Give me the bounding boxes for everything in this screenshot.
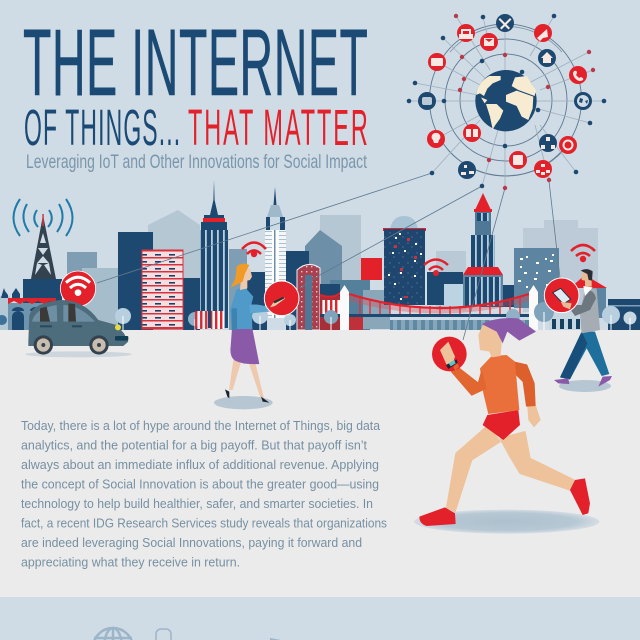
man tablet badge [544,278,579,313]
man coat [580,288,600,333]
woman head and hair [240,268,252,290]
trees [115,302,636,330]
intro paragraph: fact, a recent IDG Research Services study reveals that organizations [21,516,387,530]
icon: cropped shape [270,638,281,640]
title line two, red: THAT MATTER [188,100,368,157]
waterfront base strip [390,320,530,330]
runner shadow [414,510,599,534]
navy tower [118,232,153,330]
woman skirt [230,328,259,364]
small red dots [454,14,595,190]
background: lower panel [0,597,640,640]
node glyphs [422,18,589,175]
man legs [560,332,609,379]
church tower [463,193,503,306]
icon: wifi sign right [571,245,595,262]
intro paragraph: appreciating what they receive in return. [21,556,240,570]
icon: wifi sign centre [242,242,266,257]
slate block under bridge [363,290,390,329]
figure: man with tablet [544,269,612,392]
background: sky [0,0,640,330]
spokes [409,16,604,188]
icon: radio tower with signal waves [14,199,72,279]
wifi badge [60,271,96,306]
runner front leg [447,425,500,512]
runner hair [482,318,536,343]
bridge [320,285,540,330]
cropped icons in lower panel [93,628,281,640]
runner watch badge [432,337,467,371]
man head [582,273,592,287]
runner front arm [452,365,486,395]
icon: wifi sign bridge [424,260,448,276]
woman torso [230,287,253,329]
car with wifi badge [25,271,132,357]
car body [28,300,128,346]
red and white striped building [142,250,183,329]
network globe diagram [407,14,606,190]
empire state tower [200,180,228,328]
icon: small rounded box [156,629,171,640]
intro paragraph [21,419,387,570]
castle building [0,288,56,330]
network connector lines [97,173,560,340]
white spire tower [265,187,286,318]
runner back leg [500,432,574,490]
title line one: THE INTERNET [23,9,368,115]
runner back arm and hand [512,362,535,406]
far background buildings [148,210,200,330]
skyline [0,180,640,330]
red icon nodes [427,24,587,178]
runner shoes [419,507,456,526]
subtitle: Leveraging IoT and Other Innovations for Social Impact [26,151,367,173]
runner head [478,325,502,357]
mid blocks [427,272,463,305]
intro paragraph: technology to help build healthier, safer, and smarter societies. In [21,497,373,511]
woman phone badge [264,281,299,316]
man shadow [559,380,611,392]
woman legs [229,360,264,398]
rings [430,24,582,176]
intro paragraph: analytics, and the potential for a big payoff. But that payoff isn’t [21,438,367,452]
woman shadow [214,396,273,409]
intro paragraph: always about an immediate influx of additional revenue. Applying [21,458,379,472]
navy icon nodes [418,14,592,179]
car shadow [25,351,132,357]
right waterfront blocks [570,275,607,288]
runner shorts [483,410,520,440]
small navy dots [407,14,606,188]
brick building [297,264,320,330]
red block [361,258,382,280]
background: ground [0,330,640,598]
title [23,9,368,157]
figure: runner [414,318,599,534]
intro paragraph: Today, there is a lot of hype around the Internet of Things, big data [21,419,380,433]
car wheels [34,335,53,355]
intro paragraph: are indeed leveraging Social Innovations, paying it forward and [21,536,362,550]
intro paragraph: the concept of Social Innovation is about the greater good—using [21,478,379,492]
figure: woman with phone [214,264,299,409]
dome building [383,216,426,305]
globe [475,70,537,131]
icon: globe outline [93,628,133,640]
window building [514,248,559,308]
title line two, navy: OF THINGS... [24,100,180,157]
runner torso [480,355,519,414]
